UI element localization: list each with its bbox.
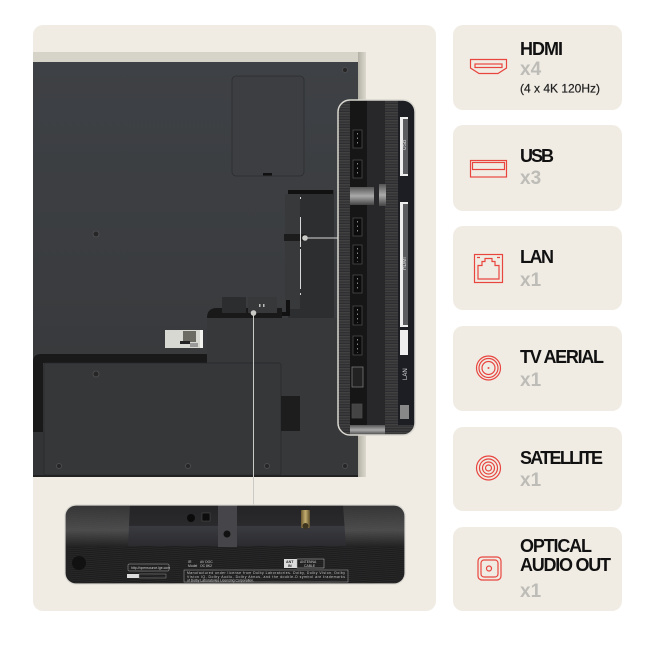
rear markings (127, 559, 348, 582)
rear markings: IN (288, 564, 292, 568)
card: HDMI (453, 25, 622, 110)
rear markings: of Dolby Laboratories Licensing Corporation. (187, 578, 254, 582)
USB label: USB (520, 146, 554, 166)
rear markings: OC 8K2 (200, 564, 212, 568)
power socket (72, 556, 86, 570)
lower body (207, 318, 358, 477)
Optical audio out label: OPTICAL (520, 536, 592, 556)
callout line to side connectors (302, 235, 338, 241)
icon: USB port (470, 160, 506, 177)
rear markings: Model (188, 564, 197, 568)
rear markings: CABLE (304, 564, 316, 568)
rear markings: http://opensource.lge.com (131, 566, 170, 570)
Satellite label: SATELLITE (520, 448, 603, 468)
icon: LAN socket (474, 254, 502, 282)
LAN count: x1 (520, 270, 542, 291)
port label strips (400, 117, 408, 380)
QR code (400, 405, 409, 419)
HDMI label: HDMI (520, 39, 563, 59)
bottom cover (44, 363, 281, 475)
panel: bottom connectors close-up (65, 505, 405, 584)
top access door (232, 76, 304, 176)
icon: optical socket (478, 557, 501, 580)
recess left (128, 505, 218, 546)
icon: satellite connector (476, 456, 500, 480)
card: USB (453, 125, 622, 211)
HDMI note: (4 x 4K 120Hz) (520, 82, 600, 96)
rear markings: IR (188, 560, 192, 564)
screws (56, 68, 348, 468)
LAN label: LAN (520, 247, 554, 267)
rear markings: Manufactured under license from Dolby Laboratories. Dolby, Dolby Vision, Dolby (187, 571, 345, 575)
USB count: x3 (520, 168, 541, 189)
port label strips: USB (402, 139, 408, 150)
port label strips: LAN (403, 368, 409, 380)
TV aerial label: TV AERIAL (520, 347, 604, 367)
center clip (218, 505, 237, 547)
icon: aerial connector (476, 356, 500, 380)
clip (350, 187, 374, 205)
cable recess (33, 308, 282, 450)
recess right (237, 505, 346, 546)
Satellite count: x1 (520, 470, 542, 491)
TV aerial count: x1 (520, 370, 542, 391)
connector bay (222, 190, 334, 318)
rating label (165, 330, 203, 348)
side wings (65, 505, 130, 547)
port contacts (357, 133, 358, 353)
HDMI count: x4 (520, 59, 542, 80)
rear markings: ANTENNA (300, 560, 317, 564)
wall shadow frame behind TV (33, 52, 366, 477)
side handle (281, 396, 300, 431)
TV back (33, 62, 358, 477)
coaxial connector (301, 510, 310, 529)
Optical audio out count: x1 (520, 581, 542, 602)
callout line to bottom connectors (251, 310, 256, 506)
card: Optical audio out: AUDIO OUT (520, 555, 611, 575)
ports (352, 130, 363, 418)
card: Satellite (453, 427, 622, 511)
panel: TV rear view (33, 25, 436, 611)
card: LAN (453, 226, 622, 310)
port label strips: HDMI (402, 257, 408, 270)
card: TV aerial (453, 326, 622, 411)
rear markings: Vision IQ, Dolby Audio, Dolby Atmos, and the double-D symbol are trademarks (187, 575, 345, 579)
headphone and optical ports (187, 514, 195, 522)
panel: side connectors close-up (338, 100, 415, 435)
card: Optical audio out (453, 527, 622, 611)
rear markings: AV DOC (200, 560, 213, 564)
rear markings: ANT (286, 560, 294, 564)
icon: HDMI port (470, 60, 506, 74)
